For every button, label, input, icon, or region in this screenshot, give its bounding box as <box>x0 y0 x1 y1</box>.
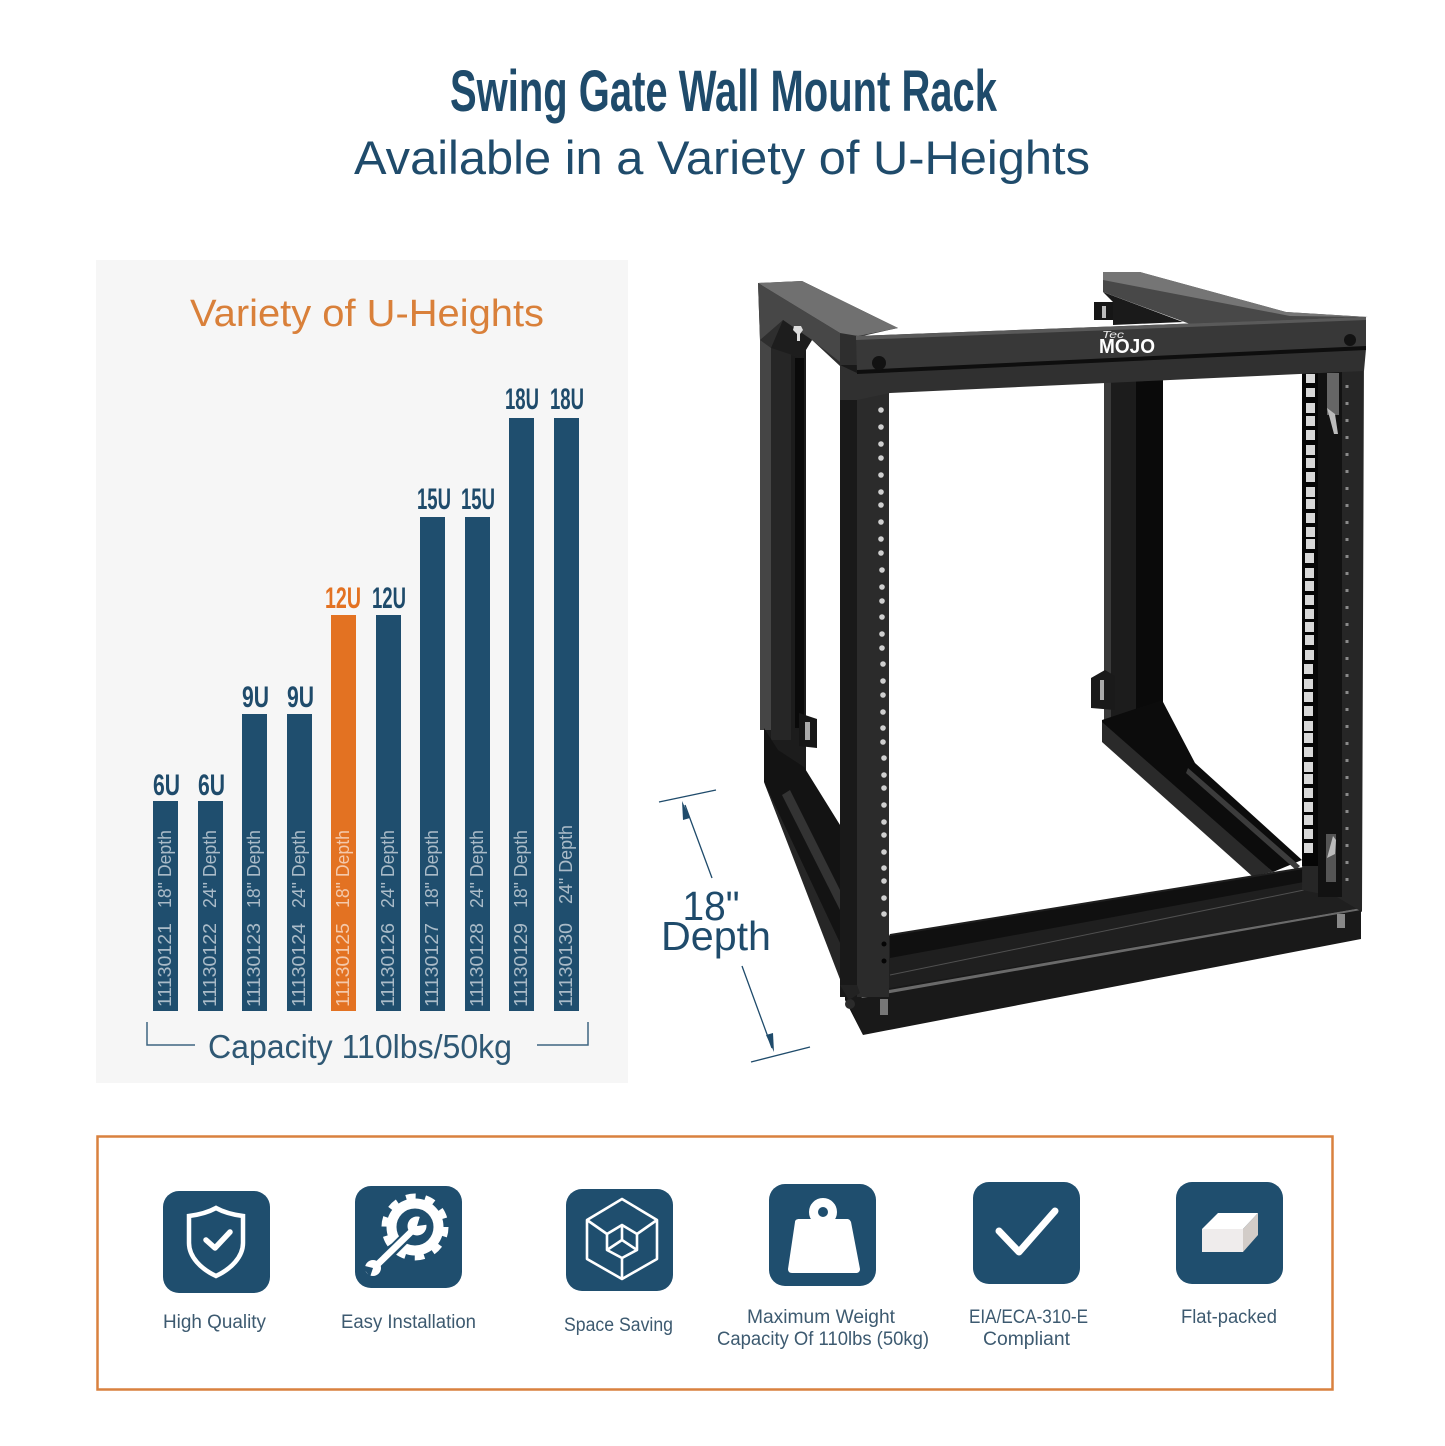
bar chart: 24" Depth <box>200 830 220 908</box>
feature: EIA/ECA compliant: EIA/ECA-310-E <box>969 1307 1088 1328</box>
subtitle: Available in a Variety of U-Heights <box>354 131 1090 184</box>
top right arm <box>1094 272 1368 325</box>
depth dimension <box>659 790 810 1062</box>
feature: maximum weight <box>717 1184 929 1350</box>
top frame bar with logo <box>840 317 1366 400</box>
bar chart: 12U <box>372 582 406 615</box>
capacity label: Capacity 110lbs/50kg <box>208 1028 512 1065</box>
front right upright <box>1302 350 1364 912</box>
bar chart: 11130123 <box>244 923 264 1007</box>
bar chart: 6U <box>198 769 225 802</box>
lower back rails <box>764 700 1302 1035</box>
logo: Tec MOJO: MOJO <box>1099 336 1155 358</box>
features panel <box>98 1136 1332 1390</box>
bar chart: 11130126 <box>378 923 398 1007</box>
feature: easy installation: Easy Installation <box>341 1312 476 1333</box>
depth label: 18" <box>682 883 740 929</box>
feature: space saving <box>564 1189 673 1336</box>
front left upright <box>840 365 889 1000</box>
top left arm <box>758 281 898 372</box>
bar chart: 24" Depth <box>289 830 309 908</box>
bar chart: 6U <box>153 769 180 802</box>
feature: EIA/ECA compliant: Compliant <box>983 1329 1071 1350</box>
title: Swing Gate Wall Mount Rack <box>450 59 998 124</box>
panel: variety of U-heights <box>96 260 628 1083</box>
small side holes right <box>1346 385 1348 895</box>
feature: EIA/ECA compliant <box>969 1182 1088 1350</box>
bar chart: 11130130 <box>556 923 576 1007</box>
product image: swing gate rack <box>758 272 1368 1035</box>
front rack square holes right <box>1304 374 1315 853</box>
bar chart: 11130121 <box>155 923 175 1007</box>
capacity bracket <box>147 1022 588 1045</box>
bar chart: 18" Depth <box>511 830 531 908</box>
back right upright <box>1091 350 1163 725</box>
bar chart: 24" Depth <box>467 830 487 908</box>
bar chart: 15U <box>417 483 451 516</box>
bar chart: 11130125 <box>333 923 353 1007</box>
bar chart: 11130128 <box>467 923 487 1007</box>
back left upright <box>760 330 817 770</box>
logo: Tec MOJO: Tec <box>1102 330 1124 341</box>
bar chart: 15U <box>461 483 495 516</box>
feature: space saving: Space Saving <box>564 1315 673 1336</box>
bar chart: 18" Depth <box>422 830 442 908</box>
dimension arrows <box>659 790 810 1062</box>
feature: high quality <box>163 1191 270 1333</box>
feature: high quality: High Quality <box>163 1312 266 1333</box>
feature: easy installation <box>341 1186 476 1333</box>
depth dimension: Depth <box>661 913 771 959</box>
front rack holes left <box>878 407 887 964</box>
bar chart: 11130127 <box>422 923 442 1007</box>
feature: maximum weight: Maximum Weight <box>747 1307 896 1328</box>
bar chart: 18" Depth <box>244 830 264 908</box>
bar chart: 11130129 <box>511 923 531 1007</box>
bottom frame and base <box>840 867 1361 1035</box>
feature: flat-packed <box>1176 1182 1283 1328</box>
bar chart: 9U <box>287 681 314 714</box>
bar chart: 18U <box>550 383 584 416</box>
bar chart: 11130124 <box>289 923 309 1007</box>
feature: flat-packed: Flat-packed <box>1181 1307 1277 1328</box>
panel heading: Variety of U-Heights <box>190 293 544 335</box>
bar chart <box>153 383 584 1011</box>
bar chart: 18" Depth <box>155 830 175 908</box>
bar chart: 9U <box>242 681 269 714</box>
bar chart: 24" Depth <box>556 825 576 904</box>
bar chart: 18" Depth <box>333 830 353 908</box>
bar chart: 18U <box>505 383 539 416</box>
bar chart: 24" Depth <box>378 830 398 908</box>
feature: maximum weight: Capacity Of 110lbs (50kg) <box>717 1329 929 1350</box>
bar chart: 11130122 <box>200 923 220 1007</box>
bar chart: 12U <box>325 582 361 615</box>
